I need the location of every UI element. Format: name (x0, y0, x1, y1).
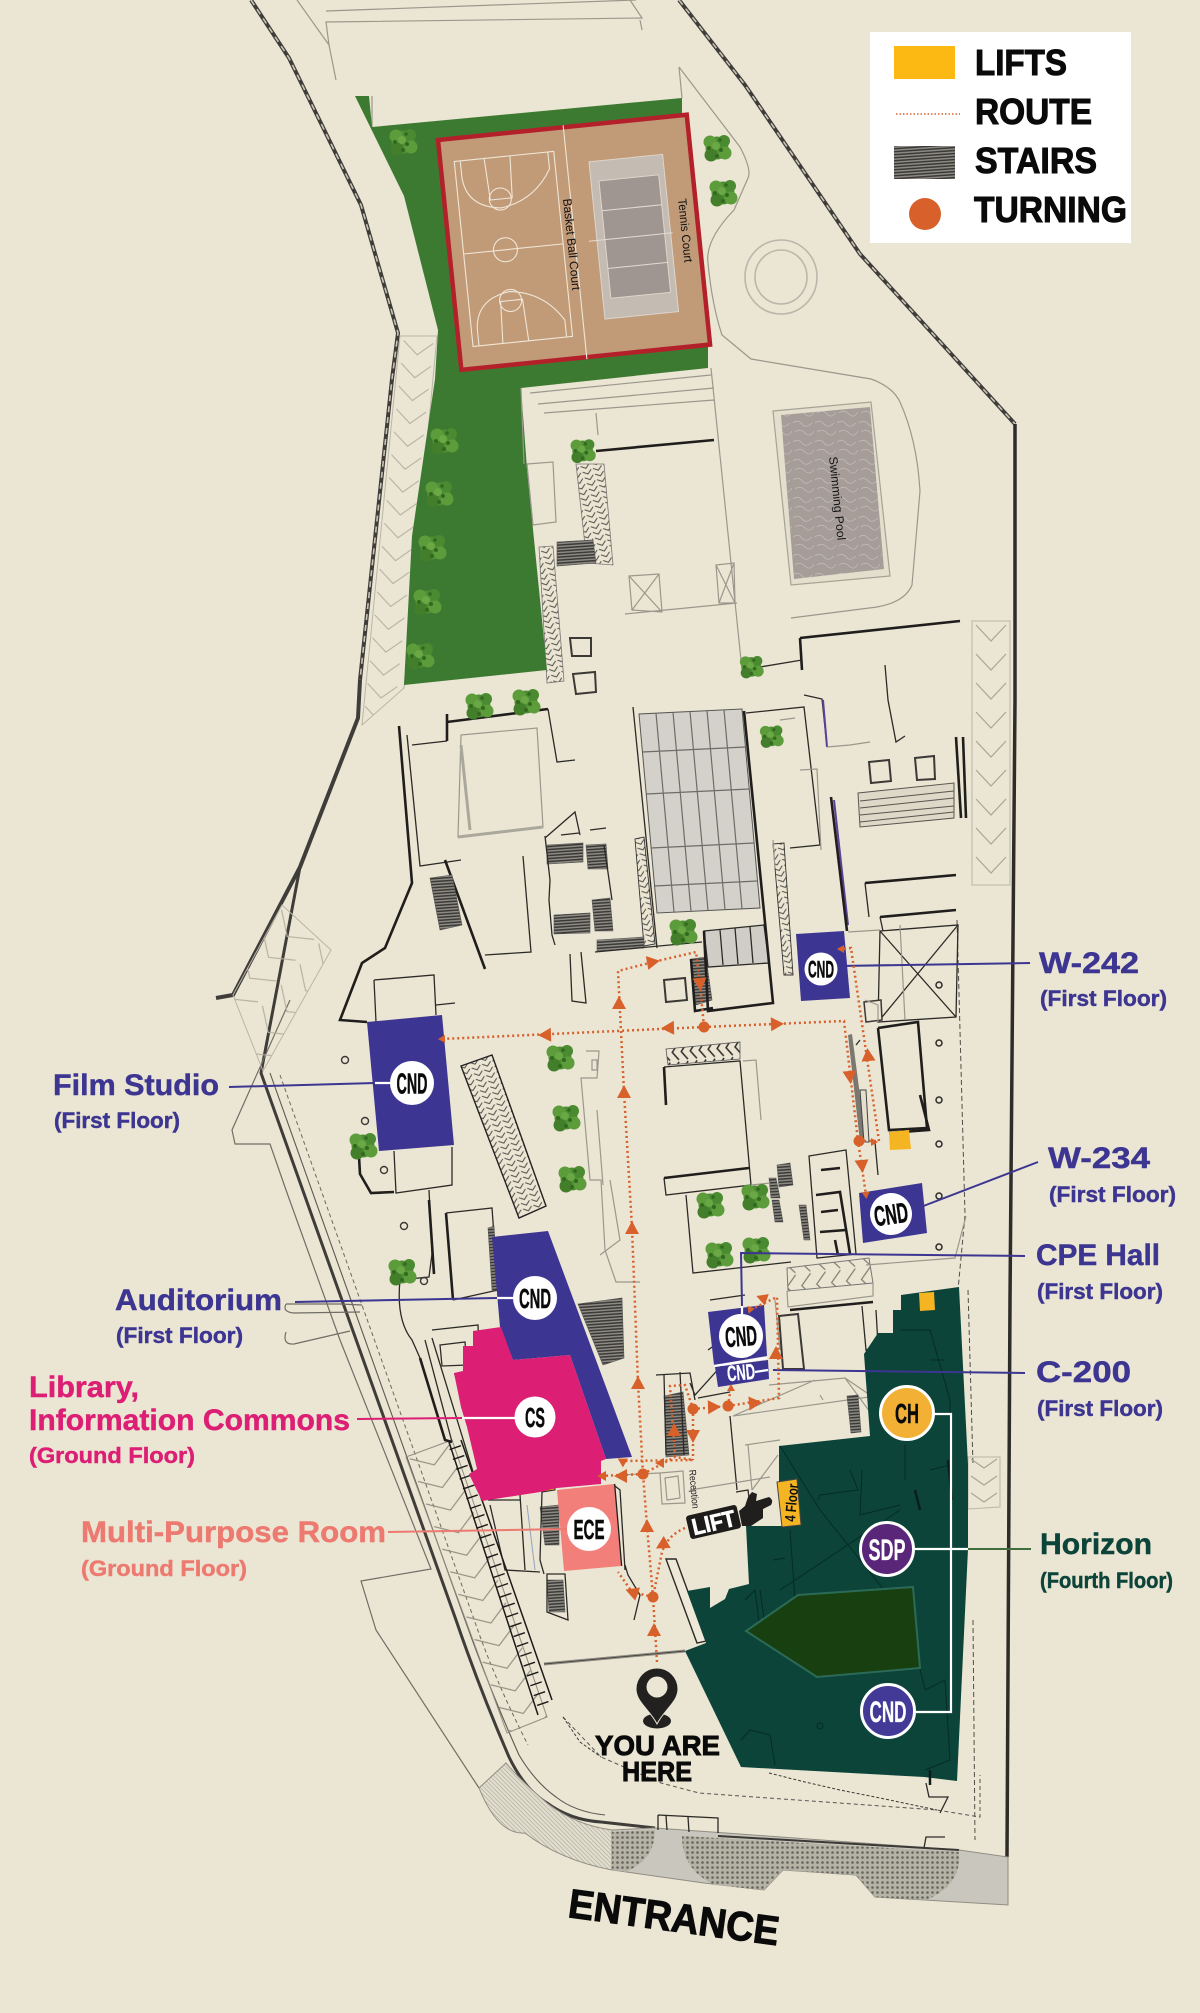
label: Library, Information Commons: Information Commons (29, 1404, 350, 1437)
site boundary and outer paths (216, 0, 1015, 1857)
label: Film Studio (53, 1069, 219, 1133)
label: Library, Information Commons: (Ground Floor) (29, 1443, 195, 1468)
ramp chevron strips (233, 336, 1010, 1733)
room: multi-purpose block (557, 1484, 621, 1571)
sports courts (438, 113, 710, 372)
label: Multi-Purpose Room: Multi-Purpose Room (81, 1516, 386, 1549)
label: CPE Hall: CPE Hall (1036, 1239, 1160, 1272)
badge: auditorium CND: CND (519, 1283, 551, 1314)
swimming pool: Swimming Pool (826, 456, 848, 541)
legend: route: ROUTE (975, 91, 1092, 132)
badge: W-242 CND: CND (808, 956, 834, 984)
lift tag: LIFT (689, 1505, 738, 1540)
icon: pointing hand (739, 1492, 772, 1526)
label: C-200: C-200 (1036, 1356, 1131, 1389)
building linework north (521, 368, 960, 742)
badge: film studio CND (390, 1061, 434, 1105)
badge: horizon SDP: SDP (868, 1534, 906, 1567)
legend: stairs: STAIRS (975, 140, 1097, 181)
reception label: Reception (686, 1469, 700, 1509)
label: W-234: (First Floor) (1049, 1182, 1176, 1207)
badge: CPE hall CND (718, 1313, 764, 1359)
badge: horizon CH (880, 1386, 934, 1440)
lifts on map (540, 1130, 935, 1492)
trees (350, 129, 784, 1286)
badge: CPE hall CND: CND (724, 1320, 758, 1353)
label: Horizon: Horizon (1040, 1528, 1152, 1561)
label: Multi-Purpose Room (81, 1516, 386, 1581)
room: CPE hall and C-200 blocks (708, 1305, 769, 1387)
legend: turning: TURNING (974, 189, 1127, 230)
entrance paving (479, 1763, 1008, 1905)
room: film studio block (367, 1015, 454, 1151)
label: W-242: W-242 (1039, 947, 1139, 980)
badge: multi-purpose ECE: ECE (574, 1514, 604, 1545)
you are here pin (636, 1668, 678, 1728)
4 floor sign (777, 1479, 802, 1527)
basketball court (452, 125, 587, 370)
route lines (442, 948, 879, 1662)
swimming pool (773, 402, 890, 585)
label: W-242: (First Floor) (1040, 986, 1167, 1011)
badge: auditorium CND (513, 1276, 557, 1320)
roundabout (745, 240, 817, 314)
badge: C-200 CND: CND (726, 1359, 756, 1386)
label: W-234: W-234 (1048, 1142, 1150, 1175)
label: Library, Information Commons (29, 1371, 350, 1468)
legend: lifts: LIFTS (975, 42, 1067, 83)
horizon interior linework (741, 1330, 952, 1785)
badge: W-234 CND (867, 1190, 915, 1238)
route arrows (438, 945, 878, 1636)
court labels (560, 198, 695, 291)
tennis court (581, 154, 681, 320)
badge: horizon CND: CND (870, 1696, 906, 1729)
label: Auditorium: Auditorium (115, 1284, 282, 1317)
4 floor sign: 4 Floor (782, 1483, 802, 1522)
entrance label: ENTRANCE (566, 1880, 782, 1954)
horizon fourth floor block (685, 1287, 968, 1781)
badge: W-234 CND: CND (872, 1197, 910, 1232)
label: Horizon: (Fourth Floor) (1040, 1568, 1173, 1593)
badge: horizon CH: CH (895, 1398, 919, 1429)
badge: W-242 CND (804, 952, 838, 986)
badge: library CS (514, 1396, 556, 1438)
room: library block (454, 1327, 606, 1501)
label: C-200: (First Floor) (1037, 1396, 1163, 1421)
badge: horizon SDP (860, 1522, 914, 1576)
label: Auditorium: (First Floor) (116, 1323, 243, 1348)
label: W-242 (1039, 947, 1167, 1011)
label: Film Studio: Film Studio (53, 1069, 219, 1102)
horizon courtyard lawn (746, 1587, 920, 1677)
room: auditorium block (492, 1231, 632, 1459)
court labels: Basket Ball Court (560, 198, 583, 291)
room: W-242 block (796, 931, 850, 1001)
label: Multi-Purpose Room: (Ground Floor) (81, 1556, 247, 1581)
badge: multi-purpose ECE (567, 1507, 611, 1551)
legend: turning (909, 189, 1127, 230)
badge: horizon CND (862, 1684, 914, 1738)
label: Library, Information Commons: Library, (29, 1371, 139, 1404)
legend: stairs (894, 140, 1097, 181)
you are here text: YOU ARE (595, 1730, 720, 1761)
badge: film studio CND: CND (396, 1068, 428, 1100)
south building linework (425, 1283, 878, 1715)
legend (870, 32, 1131, 243)
leader lines (229, 963, 1038, 1712)
label: Auditorium (115, 1284, 282, 1348)
central building linework (545, 695, 966, 1282)
you are here text: HERE (622, 1756, 692, 1787)
label: C-200 (1036, 1356, 1163, 1421)
label: CPE Hall (1036, 1239, 1163, 1304)
room: W-234 block (859, 1183, 927, 1243)
glass roof (639, 709, 760, 913)
label: W-234 (1048, 1142, 1176, 1207)
lawn (355, 96, 708, 685)
stairs blocks (540, 843, 810, 1612)
you are here text (595, 1730, 720, 1787)
label: Film Studio: (First Floor) (54, 1108, 180, 1133)
legend: lifts (894, 42, 1067, 83)
badge: library CS: CS (525, 1402, 545, 1433)
west building linework (340, 709, 575, 1442)
label: Horizon (1040, 1528, 1173, 1593)
label: CPE Hall: (First Floor) (1037, 1279, 1163, 1304)
court labels: Tennis Court (675, 198, 695, 264)
